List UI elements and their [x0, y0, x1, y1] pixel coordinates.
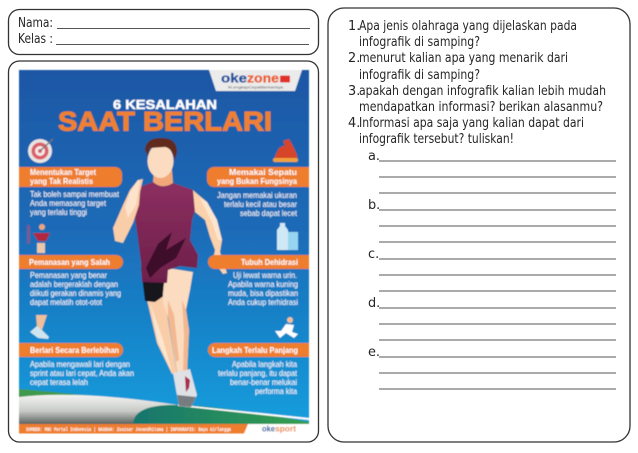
question 3: mendapatkan informasi? berikan alasanmu?	[359, 100, 603, 115]
panel: infographic frame	[8, 61, 318, 442]
panel: name and class	[8, 10, 318, 54]
item 6: long stride: benar-benar melukai	[230, 377, 297, 387]
item 1: target: Anda memasang target	[30, 198, 107, 208]
shoe	[173, 369, 197, 407]
panel: questions	[328, 8, 630, 442]
item 3: warm-up: diikuti gerakan dinamis yang	[30, 288, 121, 298]
item 3: warm-up: dapat melatih otot-otot	[30, 297, 103, 307]
item 3: warm-up: adalah bergeraklah dengan	[30, 279, 118, 289]
item 2: shoes: terlalu kecil atau besar	[224, 199, 297, 209]
item 4: dehydration: Anda cukup terhidrasi	[228, 297, 298, 307]
item 6: long stride	[208, 317, 309, 396]
black shorts	[141, 268, 172, 302]
item 2: shoes	[207, 139, 309, 218]
answer a: a.	[368, 149, 380, 164]
icon: bottle and glass	[277, 223, 298, 250]
item 2: shoes: yang Bukan Fungsinya	[217, 176, 297, 186]
item 3: warm-up: Pemanasan yang benar	[30, 270, 107, 280]
icon: target	[28, 139, 53, 163]
item 4: dehydration: muda, bisa dipastikan	[228, 288, 298, 298]
runner	[113, 138, 227, 407]
left arm	[113, 179, 143, 243]
title: 6 KESALAHAN	[113, 97, 217, 112]
question 3: 3.	[348, 84, 360, 99]
item 6: long stride: Langkah Terlalu Panjang	[212, 345, 298, 355]
item 6: long stride: performa kita	[255, 386, 297, 396]
question 2: 2.	[348, 51, 360, 66]
question 1: 1.	[348, 19, 360, 34]
item 5: overtraining: Apabila mengawali lari dengan	[30, 359, 130, 369]
answer b: b.	[368, 198, 380, 213]
front leg	[163, 268, 193, 372]
answer d: d.	[368, 296, 380, 311]
item 4: dehydration	[208, 223, 309, 307]
footer: oke	[262, 424, 276, 434]
ground	[19, 389, 310, 424]
question 2: infografik di samping?	[359, 68, 480, 83]
right arm	[193, 190, 227, 274]
question 2	[348, 51, 568, 83]
logo banner	[209, 70, 302, 91]
item 1: target: Tak boleh sampai membuat	[30, 189, 120, 199]
footer: sport	[275, 424, 296, 434]
item 4: dehydration: Apabila warna kuning	[228, 279, 298, 289]
question 4	[348, 116, 584, 147]
item 1: target	[19, 139, 122, 217]
item 5: overtraining: sprint atau lari cepat, Anda akan	[30, 368, 134, 378]
item 2: shoes: Jangan memakai ukuran	[217, 190, 297, 200]
item 4: dehydration: Tubuh Dehidrasi	[241, 257, 298, 267]
back leg	[147, 296, 177, 374]
infographic	[19, 70, 310, 434]
question 1: infografik di samping?	[359, 35, 480, 50]
hair	[145, 138, 177, 160]
logo banner: zone	[247, 70, 279, 86]
item 4: dehydration: Uji lewat warna urin.	[233, 270, 297, 280]
icon: stretching person	[27, 224, 50, 253]
item 3: warm-up	[19, 224, 123, 307]
item 5: overtraining	[19, 315, 134, 387]
question 1: Apa jenis olahraga yang dijelaskan pada	[359, 19, 577, 34]
item 3: warm-up: Pemanasan yang Salah	[29, 257, 110, 267]
question 3	[348, 84, 606, 115]
item 5: overtraining: cepat terasa lelah	[30, 377, 88, 387]
question 4: Informasi apa saja yang kalian dapat dari	[359, 116, 584, 131]
item 1: target: Menentukan Target	[30, 167, 96, 177]
logo banner: #LengkapCepatBerkarisya	[228, 84, 284, 90]
shirt	[135, 182, 198, 283]
item 6: long stride: terlalu panjang, itu dapat	[218, 368, 298, 378]
item 5: overtraining: Berlari Secara Berlebihan	[30, 345, 119, 355]
answer e: e.	[368, 345, 380, 360]
item 1: target: yang terlalu tinggi	[30, 207, 87, 217]
answer c: c.	[368, 247, 379, 262]
item 2: shoes: Memakai Sepatu	[229, 167, 297, 177]
logo banner: oke	[221, 70, 247, 86]
question 4: infografik tersebut? tuliskan!	[359, 132, 514, 147]
question 2: menurut kalian apa yang menarik dari	[359, 51, 568, 66]
neck	[153, 170, 173, 186]
name field: Nama:	[18, 16, 53, 31]
class field: Kelas :	[18, 32, 53, 47]
item 6: long stride: Apabila langkah kita	[232, 359, 297, 369]
footer	[19, 424, 309, 434]
icon: running foot	[30, 315, 49, 339]
question 4: 4.	[348, 116, 360, 131]
icon: shoe	[273, 139, 298, 162]
footer: SUMBER: MNC Portal Indonesia | NASKAH: Zsuzsar Jovandhitama | INFOGRAFIS: Bayu Airlangga	[26, 427, 231, 433]
title: SAAT BERLARI	[58, 106, 272, 136]
face	[148, 144, 174, 178]
question 1	[348, 19, 577, 50]
item 1: target: yang Tak Realistis	[30, 176, 93, 186]
item 2: shoes: sebab dapat lecet	[240, 208, 298, 218]
icon: running person	[275, 317, 298, 338]
